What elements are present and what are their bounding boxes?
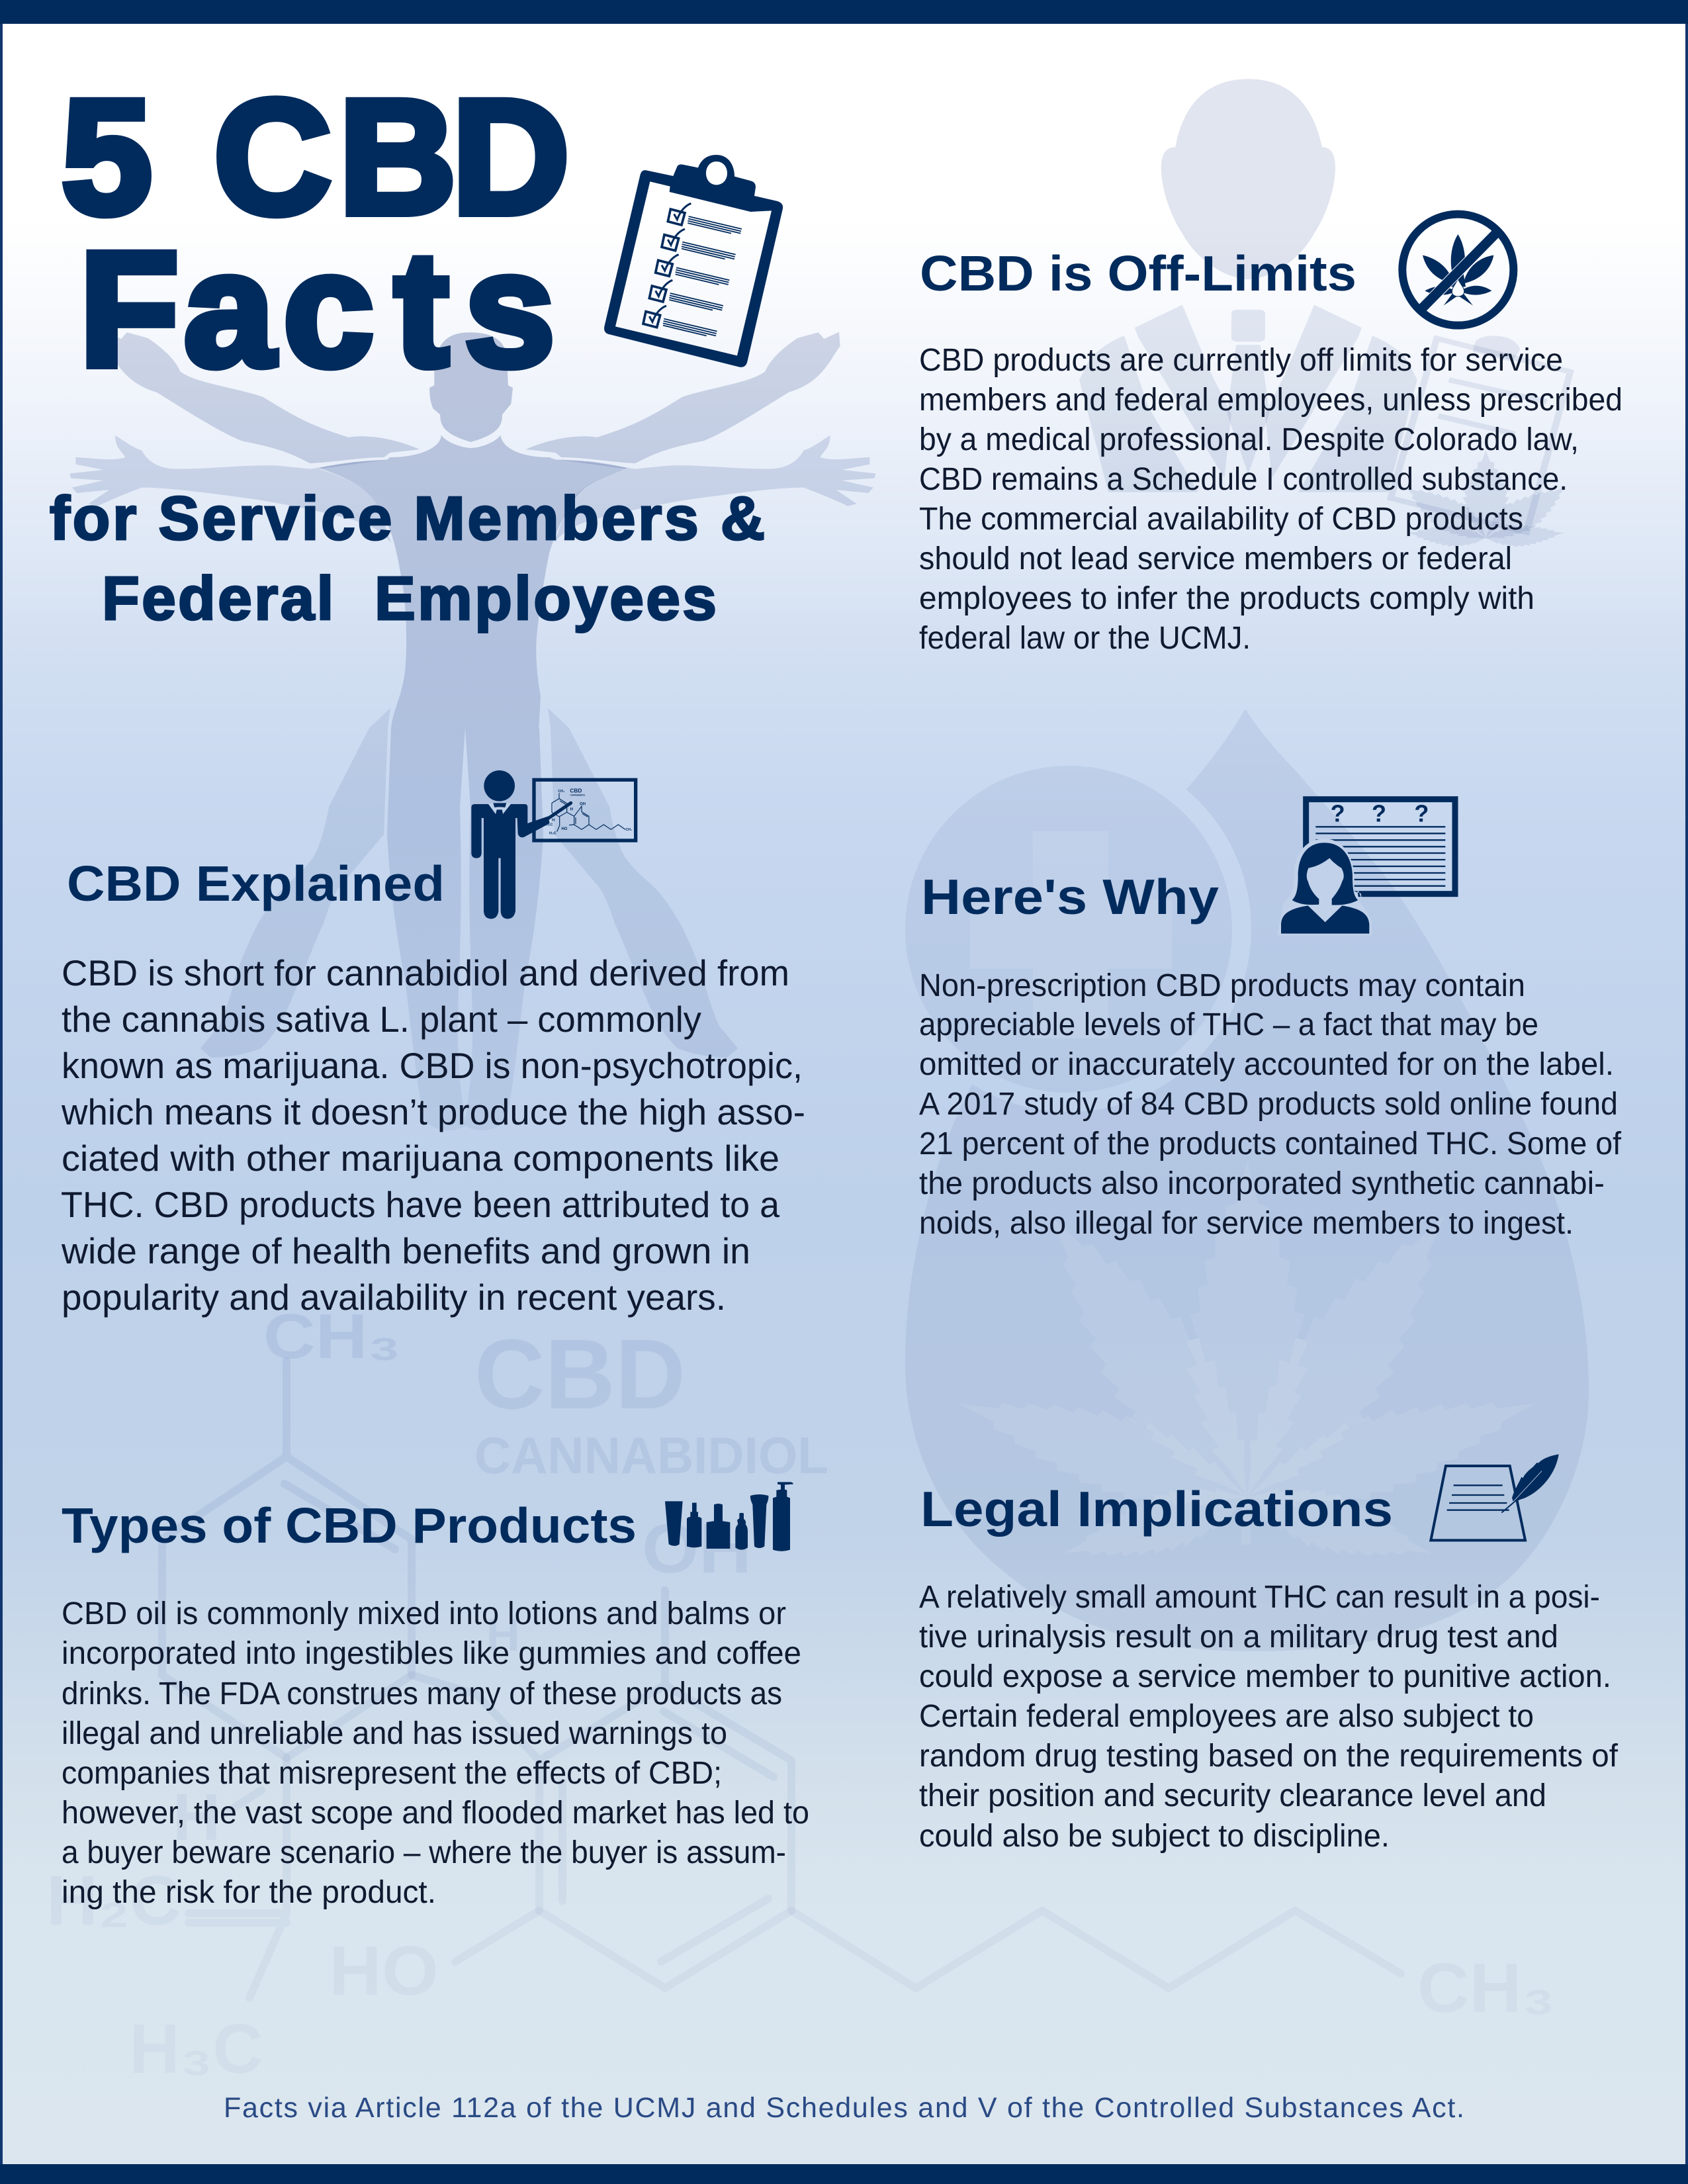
body text: The commercial availability of CBD products <box>919 502 1523 537</box>
background: faded molecule diagram: OH <box>642 1510 752 1588</box>
body text <box>919 343 1622 656</box>
body text: wide range of health benefits and grown in <box>61 1230 750 1271</box>
background: faded drop with cross and cannabis leaf <box>905 709 1589 1651</box>
body text: omitted or inaccurately accounted for on the label. <box>919 1047 1614 1082</box>
straight legs <box>387 728 543 1130</box>
icon: presenter at molecule board: H₃C <box>549 832 556 836</box>
subtitle: Federal Employees <box>102 564 717 633</box>
body text: illegal and unreliable and has issued warnings to <box>62 1716 727 1751</box>
background: Vitruvian man figure <box>69 332 875 1130</box>
head and torso <box>319 332 627 728</box>
body text: members and federal employees, unless prescribed <box>919 383 1622 418</box>
background: faded molecule diagram: HO <box>329 1932 439 2010</box>
panel: CBD is Off-Limits <box>919 214 1622 656</box>
background: faded molecule diagram: CH₃ <box>1417 1949 1555 2027</box>
body text: employees to infer the products comply with <box>919 581 1534 616</box>
panel: Types of CBD Products <box>62 1482 809 1910</box>
heading: Here's Why <box>921 869 1219 925</box>
body text: could expose a service member to punitive action. <box>919 1659 1611 1694</box>
background: faded molecule diagram: H₂C <box>46 1862 181 1940</box>
icon: presenter at molecule board <box>471 770 636 919</box>
body text: however, the vast scope and flooded market has led to <box>62 1796 809 1831</box>
background: faded molecule diagram: H <box>173 1780 220 1854</box>
body text: noids, also illegal for service members to ingest. <box>919 1206 1574 1241</box>
background: faded bust of man in suit with clipboard <box>1079 79 1580 550</box>
splayed legs <box>200 708 738 1058</box>
title <box>62 66 570 400</box>
body text: CBD remains a Schedule I controlled substance. <box>919 462 1568 497</box>
background: faded molecule diagram: H₃C <box>129 2010 263 2088</box>
body text: their position and security clearance level and <box>919 1778 1546 1813</box>
body text: tive urinalysis result on a military drug test and <box>919 1619 1558 1655</box>
icon: presenter at molecule board: H <box>552 819 555 823</box>
background: faded molecule diagram: CANNABIDIOL <box>474 1426 828 1484</box>
body text: the products also incorporated synthetic cannabi- <box>919 1166 1605 1201</box>
body text: ciated with other marijuana components like <box>62 1138 779 1179</box>
body text: popularity and availability in recent years. <box>62 1277 726 1318</box>
body text <box>919 968 1622 1241</box>
icon: presenter at molecule board: CBD <box>570 788 582 794</box>
panel: Legal Implications <box>919 1454 1619 1854</box>
body text: the cannabis sativa L. plant – commonly <box>62 999 701 1040</box>
body text: drinks. The FDA construes many of these products as <box>62 1676 782 1711</box>
left border <box>0 24 3 2164</box>
heading: Types of CBD Products <box>62 1498 637 1553</box>
subtitle <box>50 484 765 633</box>
icon: presenter at molecule board: CANNABIDIOL <box>570 794 586 797</box>
body text: known as marijuana. CBD is non-psychotropic, <box>62 1045 803 1086</box>
body text: companies that misrepresent the effects of CBD; <box>62 1756 722 1791</box>
body text: by a medical professional. Despite Colorado law, <box>919 422 1579 457</box>
icon: woman with question board <box>1277 799 1455 935</box>
body text: 21 percent of the products contained THC. Some of <box>919 1126 1622 1161</box>
body text: THC. CBD products have been attributed to a <box>61 1184 779 1225</box>
heading: CBD Explained <box>67 856 445 911</box>
title: 5 CBD <box>62 66 570 248</box>
icon: product bottles <box>665 1482 793 1551</box>
icon: woman with question board: ? <box>1372 799 1386 827</box>
body text: could also be subject to discipline. <box>919 1819 1390 1854</box>
icon: presenter at molecule board: H₂C <box>546 823 553 827</box>
body text: CBD is short for cannabidiol and derived from <box>62 952 789 993</box>
footer source note: Facts via Article 112a of the UCMJ and Schedules and V of the Controlled Substances Act. <box>224 2092 1464 2124</box>
icon: presenter at molecule board: CH₃ <box>625 828 633 832</box>
body text: federal law or the UCMJ. <box>919 621 1251 656</box>
right border <box>1685 24 1688 2164</box>
subtitle: for Service Members & <box>50 484 765 553</box>
body text: should not lead service members or federal <box>919 541 1512 576</box>
panel: CBD Explained <box>61 770 805 1318</box>
icon: document and quill <box>1431 1454 1559 1540</box>
body text: CBD products are currently off limits for service <box>919 343 1563 378</box>
body text: Certain federal employees are also subject to <box>919 1699 1534 1734</box>
body text <box>919 1580 1619 1854</box>
body text: CBD oil is commonly mixed into lotions and balms or <box>62 1596 786 1631</box>
body text: Non-prescription CBD products may contain <box>919 968 1525 1003</box>
top border bar <box>0 0 1688 24</box>
background: faded molecule diagram: H <box>486 1609 520 1661</box>
icon: presenter at molecule board: H <box>570 807 573 811</box>
body text: A 2017 study of 84 CBD products sold online found <box>919 1087 1618 1122</box>
body text: ing the risk for the product. <box>62 1875 436 1910</box>
background: faded molecule diagram: CBD <box>474 1318 686 1430</box>
body text: appreciable levels of THC – a fact that may be <box>919 1007 1538 1042</box>
medical cross circle <box>905 766 1232 1093</box>
panel: Here's Why <box>919 799 1622 1241</box>
cannabis leaf <box>946 1160 1549 1581</box>
icon: woman with question board: ? <box>1331 799 1345 827</box>
body text: random drug testing based on the requirements of <box>919 1739 1619 1774</box>
icon: presenter at molecule board: HO <box>561 827 568 831</box>
background: faded molecule diagram <box>46 1301 1555 2088</box>
bottom border bar <box>0 2164 1688 2184</box>
body text <box>62 1596 809 1910</box>
icon: woman with question board: ? <box>1414 799 1429 827</box>
body text: a buyer beware scenario – where the buyer is assum- <box>62 1835 786 1870</box>
heading: CBD is Off-Limits <box>920 246 1356 301</box>
icon: presenter at molecule board: OH <box>580 803 586 807</box>
background: faded molecule diagram: CH₃ <box>263 1301 401 1372</box>
body text: A relatively small amount THC can result in a posi- <box>919 1580 1600 1615</box>
icon: prohibited cannabis <box>1402 214 1513 326</box>
icon: clipboard checklist <box>604 155 783 367</box>
icon: presenter at molecule board: CH₃ <box>558 790 565 794</box>
heading: Legal Implications <box>920 1481 1393 1537</box>
arms <box>69 332 875 543</box>
body text <box>61 952 805 1318</box>
title: Facts <box>79 218 555 400</box>
body text: incorporated into ingestibles like gummies and coffee <box>62 1636 801 1671</box>
body text: which means it doesn’t produce the high asso- <box>61 1091 805 1132</box>
